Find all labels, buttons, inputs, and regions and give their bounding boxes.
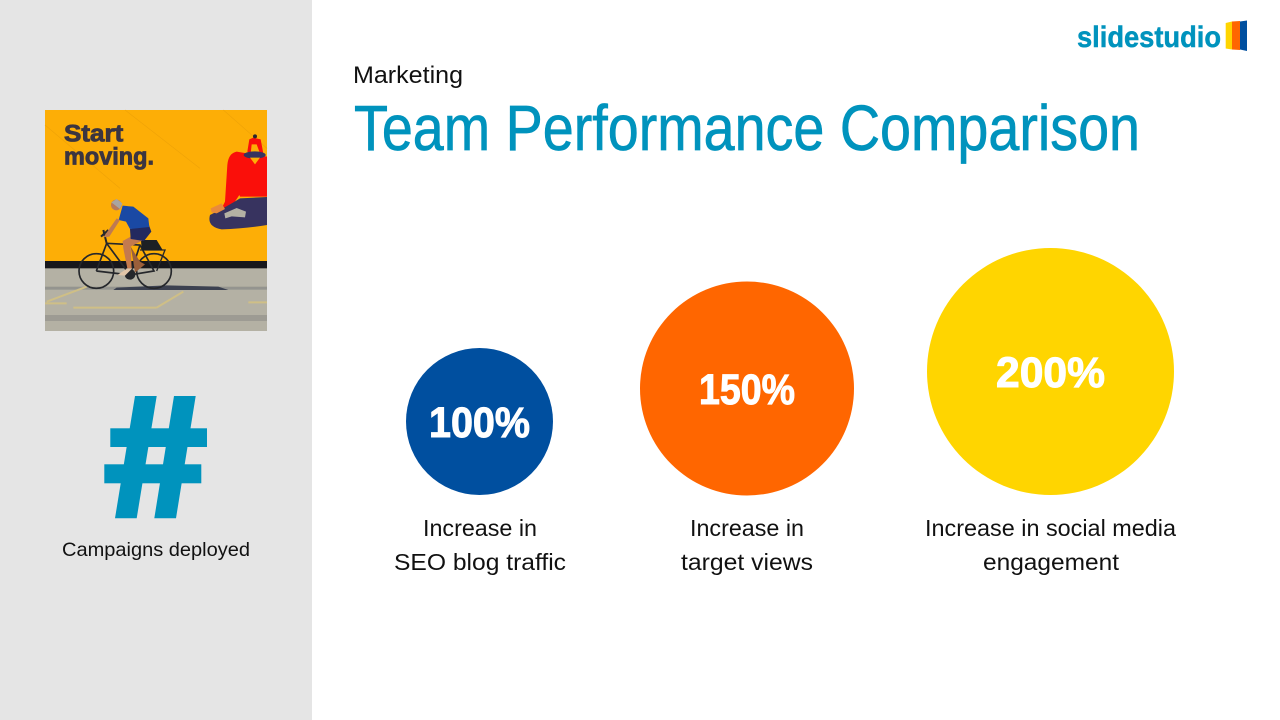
mural figure bbox=[222, 152, 267, 209]
photo: cyclist in front of yellow mural bbox=[45, 110, 267, 331]
photo: cyclist in front of yellow mural: moving. bbox=[64, 144, 154, 171]
metric: 150% target views: 150% bbox=[699, 366, 795, 414]
metric: 200% social media engagement bbox=[925, 248, 1176, 575]
photo: cyclist in front of yellow mural: Start bbox=[64, 121, 123, 148]
metric: 200% social media engagement: engagement bbox=[983, 549, 1120, 575]
metric: 200% social media engagement: Increase in social media bbox=[925, 515, 1176, 541]
metric: 150% target views bbox=[640, 282, 854, 575]
logo: slidestudio: slidestudio bbox=[1077, 21, 1221, 54]
metric: 100% SEO blog traffic: SEO blog traffic bbox=[394, 549, 566, 575]
metric: 150% target views: target views bbox=[681, 549, 813, 575]
metric: 100% SEO blog traffic: Increase in bbox=[423, 515, 537, 541]
title: Team Performance Comparison bbox=[354, 92, 1140, 164]
bicycle bbox=[79, 230, 171, 288]
metric: 200% social media engagement: 200% bbox=[996, 349, 1105, 397]
label: campaigns deployed: Campaigns deployed bbox=[62, 539, 250, 561]
panel: left sidebar bbox=[0, 0, 312, 720]
rider bbox=[123, 234, 143, 268]
metric: 100% SEO blog traffic: 100% bbox=[429, 399, 530, 447]
icon: hash symbol bbox=[104, 396, 207, 518]
metric: 100% SEO blog traffic bbox=[394, 348, 566, 575]
eyebrow: Marketing: Marketing bbox=[353, 62, 463, 89]
metric: 150% target views: Increase in bbox=[690, 515, 804, 541]
